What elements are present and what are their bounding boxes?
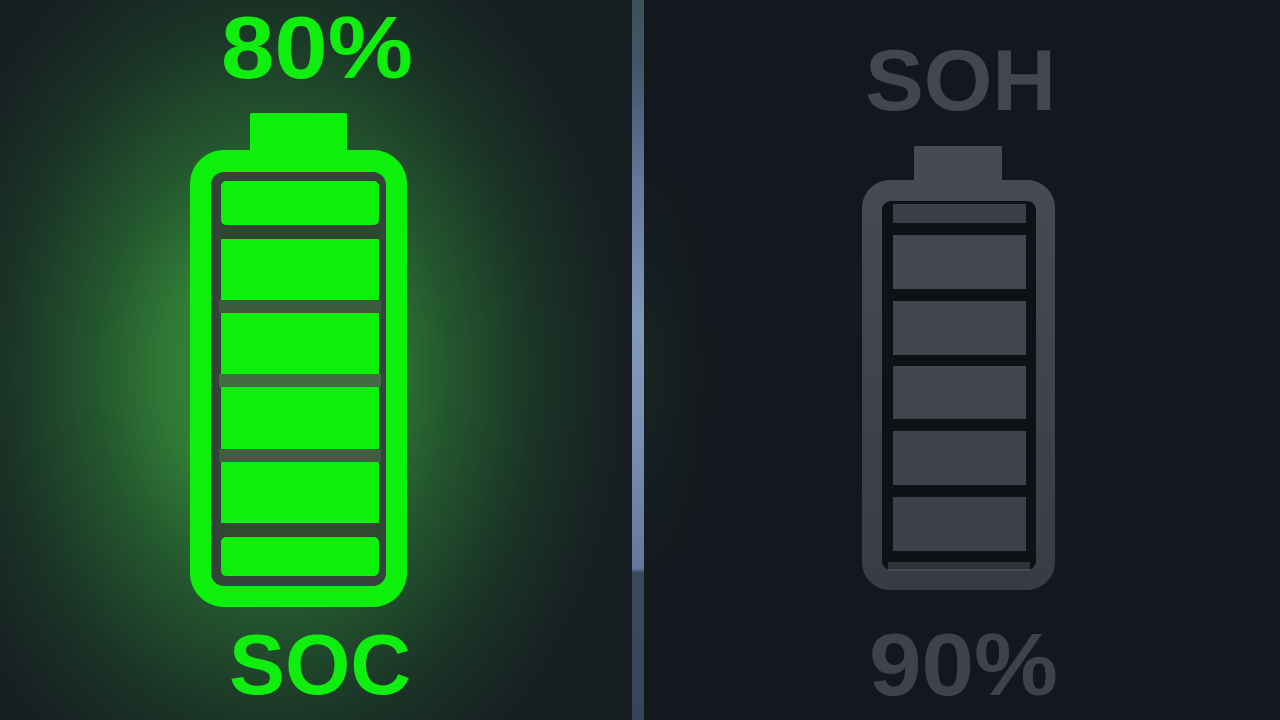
heading: 80%: 80% [221,0,413,97]
heading: SOH: SOH [865,33,1056,129]
divider [632,0,644,720]
icon: grey battery [862,146,1055,590]
icon: green battery [190,113,407,607]
panel: SOH [644,0,1280,720]
label: 90%: 90% [869,615,1058,714]
label: SOC: SOC [229,618,411,713]
panel: SOC [0,0,632,720]
